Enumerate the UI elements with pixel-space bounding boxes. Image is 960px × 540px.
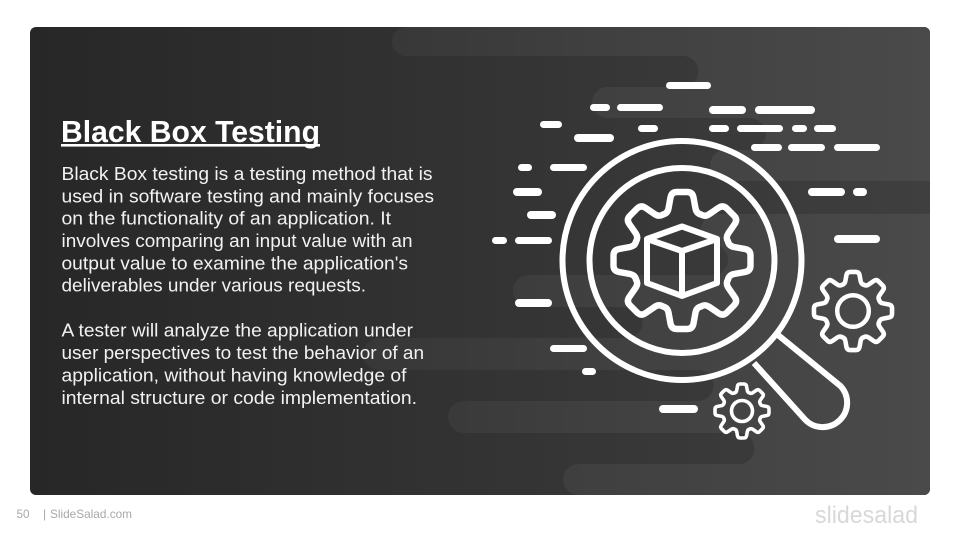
footer: page number and site: SlideSalad.com [50, 507, 132, 521]
title: Black Box Testing [61, 114, 320, 149]
text block: definition paragraph [62, 163, 434, 296]
footer: page number and site: 50 [16, 507, 30, 521]
icon: magnifying glass [562, 141, 847, 427]
text block: tester paragraph: A tester will analyze the application under [62, 320, 413, 341]
text block: definition paragraph: deliverables under various requests. [62, 275, 366, 296]
text block: tester paragraph [62, 320, 424, 408]
text block: tester paragraph: user perspectives to test the behavior of an [62, 342, 424, 363]
text block: definition paragraph: on the functionality of an application. It [62, 208, 391, 229]
text block: definition paragraph: output value to examine the application's [62, 252, 408, 273]
text block: definition paragraph: Black Box testing is a testing method that is [62, 163, 433, 184]
text block: definition paragraph: used in software testing and mainly focuses [62, 185, 434, 206]
icon: right gear [814, 272, 892, 350]
footer: logo: slidesalad [815, 502, 918, 529]
icon: small gear [715, 384, 769, 438]
footer: page number and site: | [43, 507, 46, 521]
icon: large gear with box [614, 192, 750, 329]
text block: tester paragraph: internal structure or code implementation. [62, 387, 417, 408]
motion dashes around the magnifier [492, 82, 880, 413]
text block: definition paragraph: involves comparing an input value with an [62, 230, 412, 251]
text block: tester paragraph: application, without having knowledge of [62, 365, 407, 386]
